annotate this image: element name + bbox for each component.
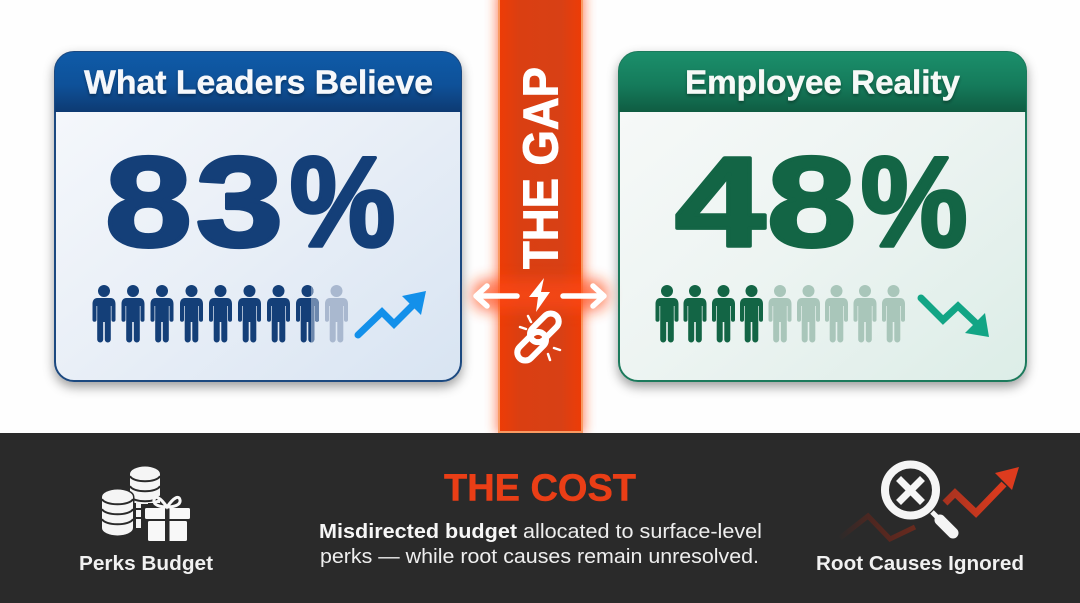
red trend arrow	[945, 484, 1004, 513]
icon: trend arrow and magnifier	[840, 464, 1019, 539]
panel card: leaders	[55, 52, 461, 381]
panel: Employee Reality	[619, 52, 1026, 381]
icon: double arrows	[476, 286, 604, 306]
bar	[499, 0, 582, 432]
description text	[319, 521, 762, 568]
back coin stack	[130, 467, 160, 528]
icon: broken chain link	[511, 310, 565, 364]
stat: 48%	[675, 131, 968, 274]
icon: coins and gift	[102, 467, 193, 544]
central bar: THE GAP	[472, 0, 608, 434]
heading: THE COST: THE COST	[444, 468, 636, 510]
front coin stack	[102, 490, 133, 535]
heading: What Leaders Believe: What Leaders Believe	[84, 64, 433, 100]
stat: 48%: %	[861, 132, 968, 274]
icon: lightning bolt	[529, 278, 550, 312]
icon row: people 4 of 9 filled	[656, 285, 905, 342]
arrow glow	[472, 279, 608, 311]
band background	[0, 433, 1080, 603]
panel header: employees	[619, 52, 1026, 112]
magnifier	[885, 464, 953, 533]
panel card: employees	[619, 52, 1026, 381]
stat: 83%: 8	[105, 131, 192, 274]
stat: 48%: 4	[675, 131, 765, 274]
label: Root Causes Ignored: Root Causes Ignored	[816, 552, 1024, 575]
stat: 83%: 3	[196, 131, 283, 274]
page background	[0, 0, 1080, 433]
description text: perks — while root causes remain unresolved.	[320, 546, 759, 568]
icon: falling arrow	[921, 298, 989, 337]
stat: 83%	[105, 131, 395, 274]
bar glow	[497, 0, 584, 434]
icon: rising arrow	[358, 291, 426, 335]
bottom band: the cost	[0, 433, 1080, 603]
panel: What Leaders Believe	[55, 52, 461, 381]
stat: 83%: %	[290, 131, 395, 274]
description text: Misdirected budget allocated to surface-level	[319, 521, 762, 543]
icon row: people 8 of 9 filled	[92, 285, 348, 342]
label: Perks Budget: Perks Budget	[79, 552, 213, 575]
label: THE GAP: THE GAP	[514, 67, 568, 269]
faded trend line	[840, 516, 915, 539]
stat: 48%: 8	[767, 131, 856, 273]
heading: Employee Reality: Employee Reality	[685, 64, 961, 100]
partially filled eighth person	[311, 286, 319, 342]
gift box	[141, 497, 193, 544]
panel header: leaders	[55, 52, 461, 112]
